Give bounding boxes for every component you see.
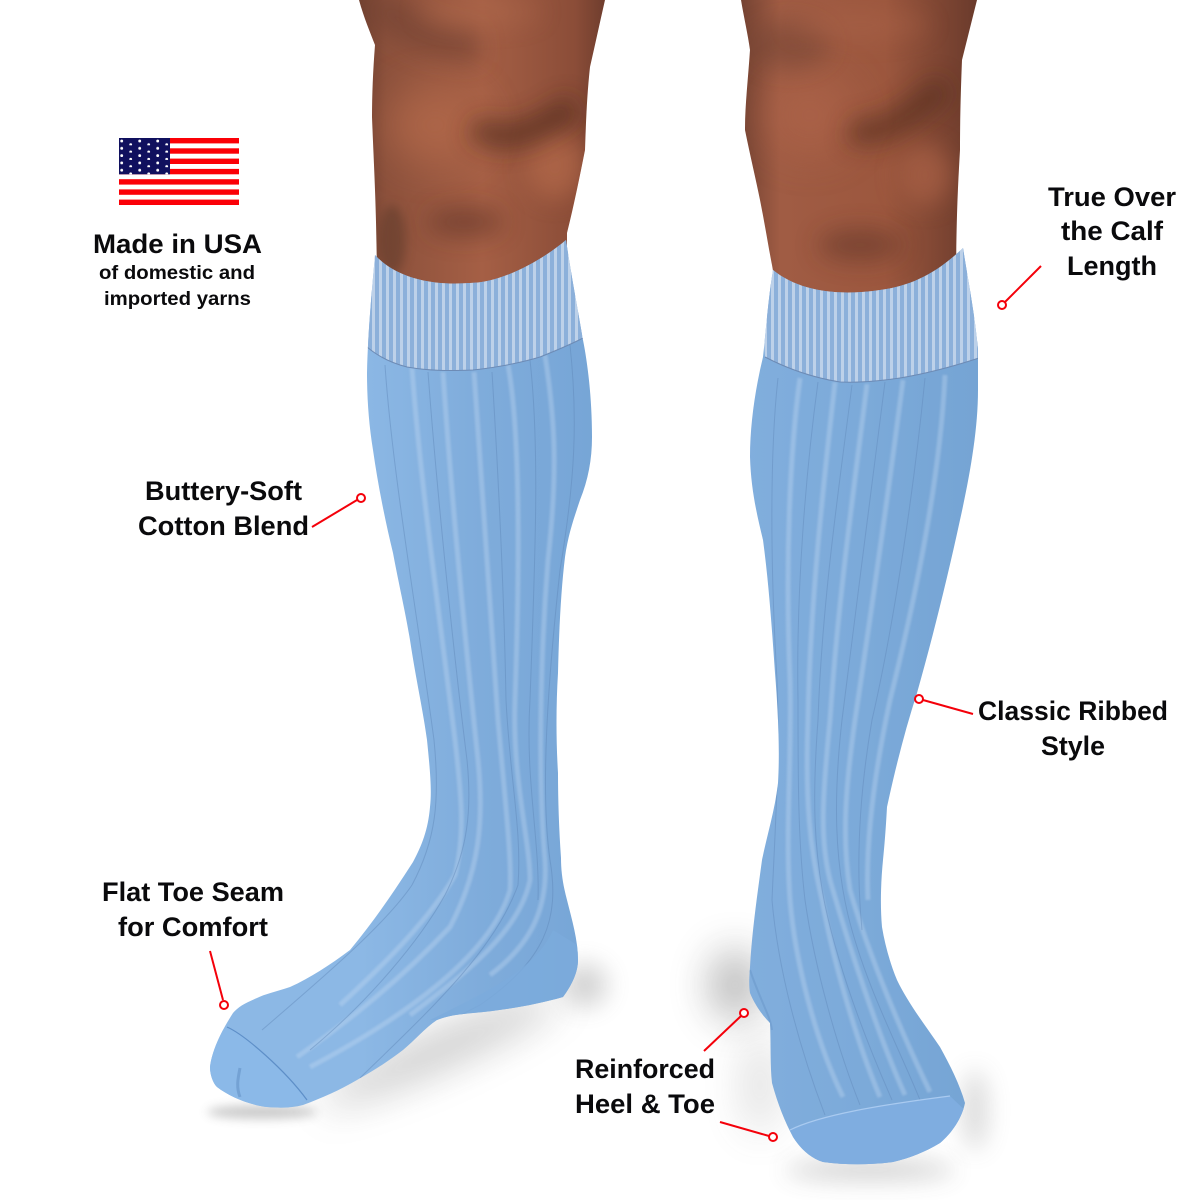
- callout: true over the calf length: Length: [1067, 251, 1157, 281]
- callout: classic ribbed style: [915, 695, 1168, 761]
- callout: buttery-soft cotton blend: Buttery-Soft: [145, 476, 302, 506]
- floor shadows: [207, 949, 987, 1179]
- right knee skin: [735, 0, 985, 300]
- left sock: [200, 230, 600, 1120]
- callout: buttery-soft cotton blend: [138, 476, 365, 541]
- callout: reinforced heel and toe: Reinforced: [575, 1054, 715, 1084]
- right sock dark ribs: [772, 378, 925, 1115]
- icon: american flag: [119, 138, 239, 205]
- callout: flat toe seam for comfort: for Comfort: [118, 912, 268, 942]
- callout: classic ribbed style: Classic Ribbed: [978, 696, 1168, 726]
- right sock: [740, 240, 980, 1175]
- callout: true over the calf length: [998, 182, 1176, 309]
- right toe cap: [792, 1096, 964, 1164]
- left heel: [437, 946, 578, 1020]
- callout: made in usa: Made in USA: [93, 229, 262, 259]
- callout: classic ribbed style: Style: [1041, 731, 1105, 761]
- right sock cuff: [760, 240, 982, 382]
- left knee skin: [359, 0, 605, 284]
- left toe cap: [210, 1029, 290, 1108]
- callout: reinforced heel and toe: Heel & Toe: [575, 1089, 715, 1119]
- callout: buttery-soft cotton blend: Cotton Blend: [138, 511, 309, 541]
- left sock cuff: [368, 240, 583, 371]
- left sock light ribs: [297, 355, 554, 1067]
- callout: flat toe seam for comfort: Flat Toe Seam: [102, 877, 284, 907]
- callout: made in usa: [93, 229, 262, 310]
- left sock dark ribs: [262, 345, 574, 1078]
- callout: true over the calf length: the Calf: [1061, 216, 1164, 246]
- right sock light ribs: [788, 375, 945, 1097]
- callout: made in usa: imported yarns: [104, 289, 251, 310]
- callout: reinforced heel and toe: [575, 1009, 777, 1141]
- callout: flat toe seam for comfort: [102, 877, 284, 1009]
- callout: made in usa: of domestic and: [99, 263, 255, 284]
- callout: true over the calf length: True Over: [1048, 182, 1176, 212]
